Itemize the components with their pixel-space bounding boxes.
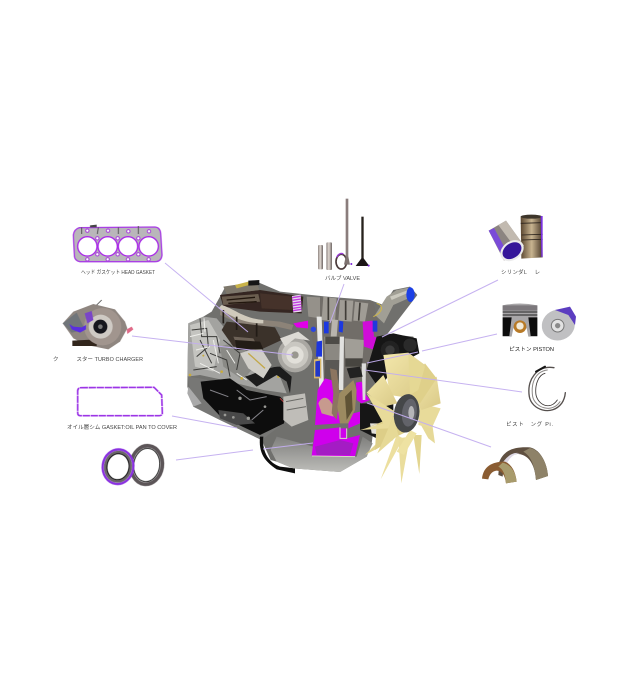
front housing xyxy=(187,317,287,393)
label: piston ring: ピスト ング Pi. xyxy=(506,420,553,428)
label: valve: バルブ VALVE xyxy=(325,274,360,282)
exhaust manifold xyxy=(220,308,293,330)
black wiring and sump area xyxy=(201,378,287,435)
turbo charger xyxy=(63,300,133,349)
engine xyxy=(187,280,441,483)
wide blades xyxy=(362,417,410,450)
dark pulley behind fan xyxy=(360,403,393,438)
seal rings xyxy=(100,444,165,486)
exhaust valve xyxy=(361,217,364,260)
label: head gasket: ヘッド ガスケット HEAD GASKET xyxy=(81,268,156,276)
pistons xyxy=(503,303,579,345)
line: turbo charger xyxy=(132,336,293,355)
crankshaft xyxy=(318,398,333,417)
striped magenta plate xyxy=(292,295,302,313)
line: seal xyxy=(176,443,313,460)
valve spring xyxy=(336,254,347,269)
head gasket xyxy=(73,225,162,262)
line: head gasket xyxy=(165,263,248,332)
line: cylinder liner xyxy=(382,280,498,337)
label: oil pan gasket: オイル層シム GASKET:OIL PAN TO COVER xyxy=(67,424,177,431)
bearing shells xyxy=(482,447,548,483)
fan xyxy=(360,353,441,483)
intake valve xyxy=(346,199,348,259)
line: valve xyxy=(330,284,344,323)
filter canister xyxy=(283,393,308,427)
label: cylinder liner: シリンダL レ xyxy=(501,268,540,276)
cylinder liners xyxy=(489,215,543,266)
piston rings xyxy=(529,367,565,411)
blue coolant passages xyxy=(316,341,322,357)
black alternator xyxy=(367,333,419,390)
right parts xyxy=(482,215,579,483)
engine body silhouette xyxy=(187,282,419,472)
upper cutaway head xyxy=(307,297,380,390)
magenta crank case xyxy=(315,378,340,425)
line: piston ring xyxy=(365,370,522,392)
valve guides xyxy=(318,245,323,269)
fan hub xyxy=(391,392,422,434)
left parts xyxy=(63,225,165,486)
oil pan xyxy=(271,437,373,472)
connecting rod xyxy=(362,363,366,400)
magenta bracket xyxy=(293,321,308,328)
label: turbo charger: ク スター TURBO CHARGER xyxy=(53,355,143,363)
line: bearing xyxy=(367,403,491,447)
leader lines xyxy=(132,263,522,460)
lower block xyxy=(187,377,287,440)
black pipe xyxy=(260,437,295,473)
line: oil pan gasket xyxy=(172,416,237,428)
line: piston xyxy=(367,334,497,363)
valve cover dark xyxy=(220,290,303,313)
intake pipe xyxy=(375,287,411,323)
label: piston: ピストン PISTON xyxy=(509,346,554,353)
long thin blades xyxy=(381,435,403,479)
front housing details xyxy=(192,318,240,377)
valve parts xyxy=(318,199,370,270)
oil pan gasket xyxy=(78,387,162,416)
turbo scroll xyxy=(278,338,312,372)
